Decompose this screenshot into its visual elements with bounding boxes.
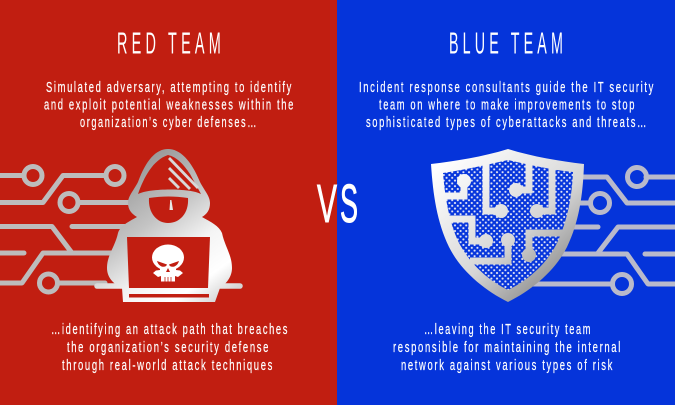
shield dotted field xyxy=(443,160,573,290)
icon: hacker with laptop xyxy=(97,149,240,302)
text: S xyxy=(340,174,358,234)
text block: red team outcome: …identifying an attack path that breaches xyxy=(51,321,289,338)
panel: blue team background xyxy=(337,0,675,405)
text block: blue team outcome xyxy=(393,321,622,374)
heading: versus: V xyxy=(317,174,337,234)
hood stripes xyxy=(169,158,198,189)
shield body xyxy=(431,149,584,302)
text block: red team intro: organization’s cyber defenses… xyxy=(80,114,258,131)
text block: red team outcome xyxy=(51,321,289,374)
hood interior xyxy=(138,155,201,194)
laptop slit xyxy=(129,294,209,298)
panel: red team background xyxy=(0,0,337,405)
text block: red team outcome: through real-world attack techniques xyxy=(62,357,274,374)
hacker laptop table line xyxy=(97,283,240,289)
text block: red team intro xyxy=(44,79,295,131)
shield circuit traces xyxy=(440,156,566,261)
text block: blue team intro xyxy=(359,79,655,131)
text block: red team outcome: the organization’s security defense xyxy=(67,339,270,356)
icon: skull xyxy=(152,244,184,282)
hacker silhouette xyxy=(107,149,232,302)
icon: shield xyxy=(431,149,584,302)
face tick xyxy=(170,200,173,210)
text block: red team intro: and exploit potential weaknesses within the xyxy=(44,96,295,114)
text: RED TEAM xyxy=(117,26,225,60)
icon: right circuit lines xyxy=(530,168,675,294)
shield circuit nodes xyxy=(457,174,544,262)
icon: left circuit lines xyxy=(0,166,135,292)
text block: red team intro: Simulated adversary, attempting to identify xyxy=(46,79,293,96)
hacker face xyxy=(149,196,188,223)
laptop screen xyxy=(127,237,210,288)
